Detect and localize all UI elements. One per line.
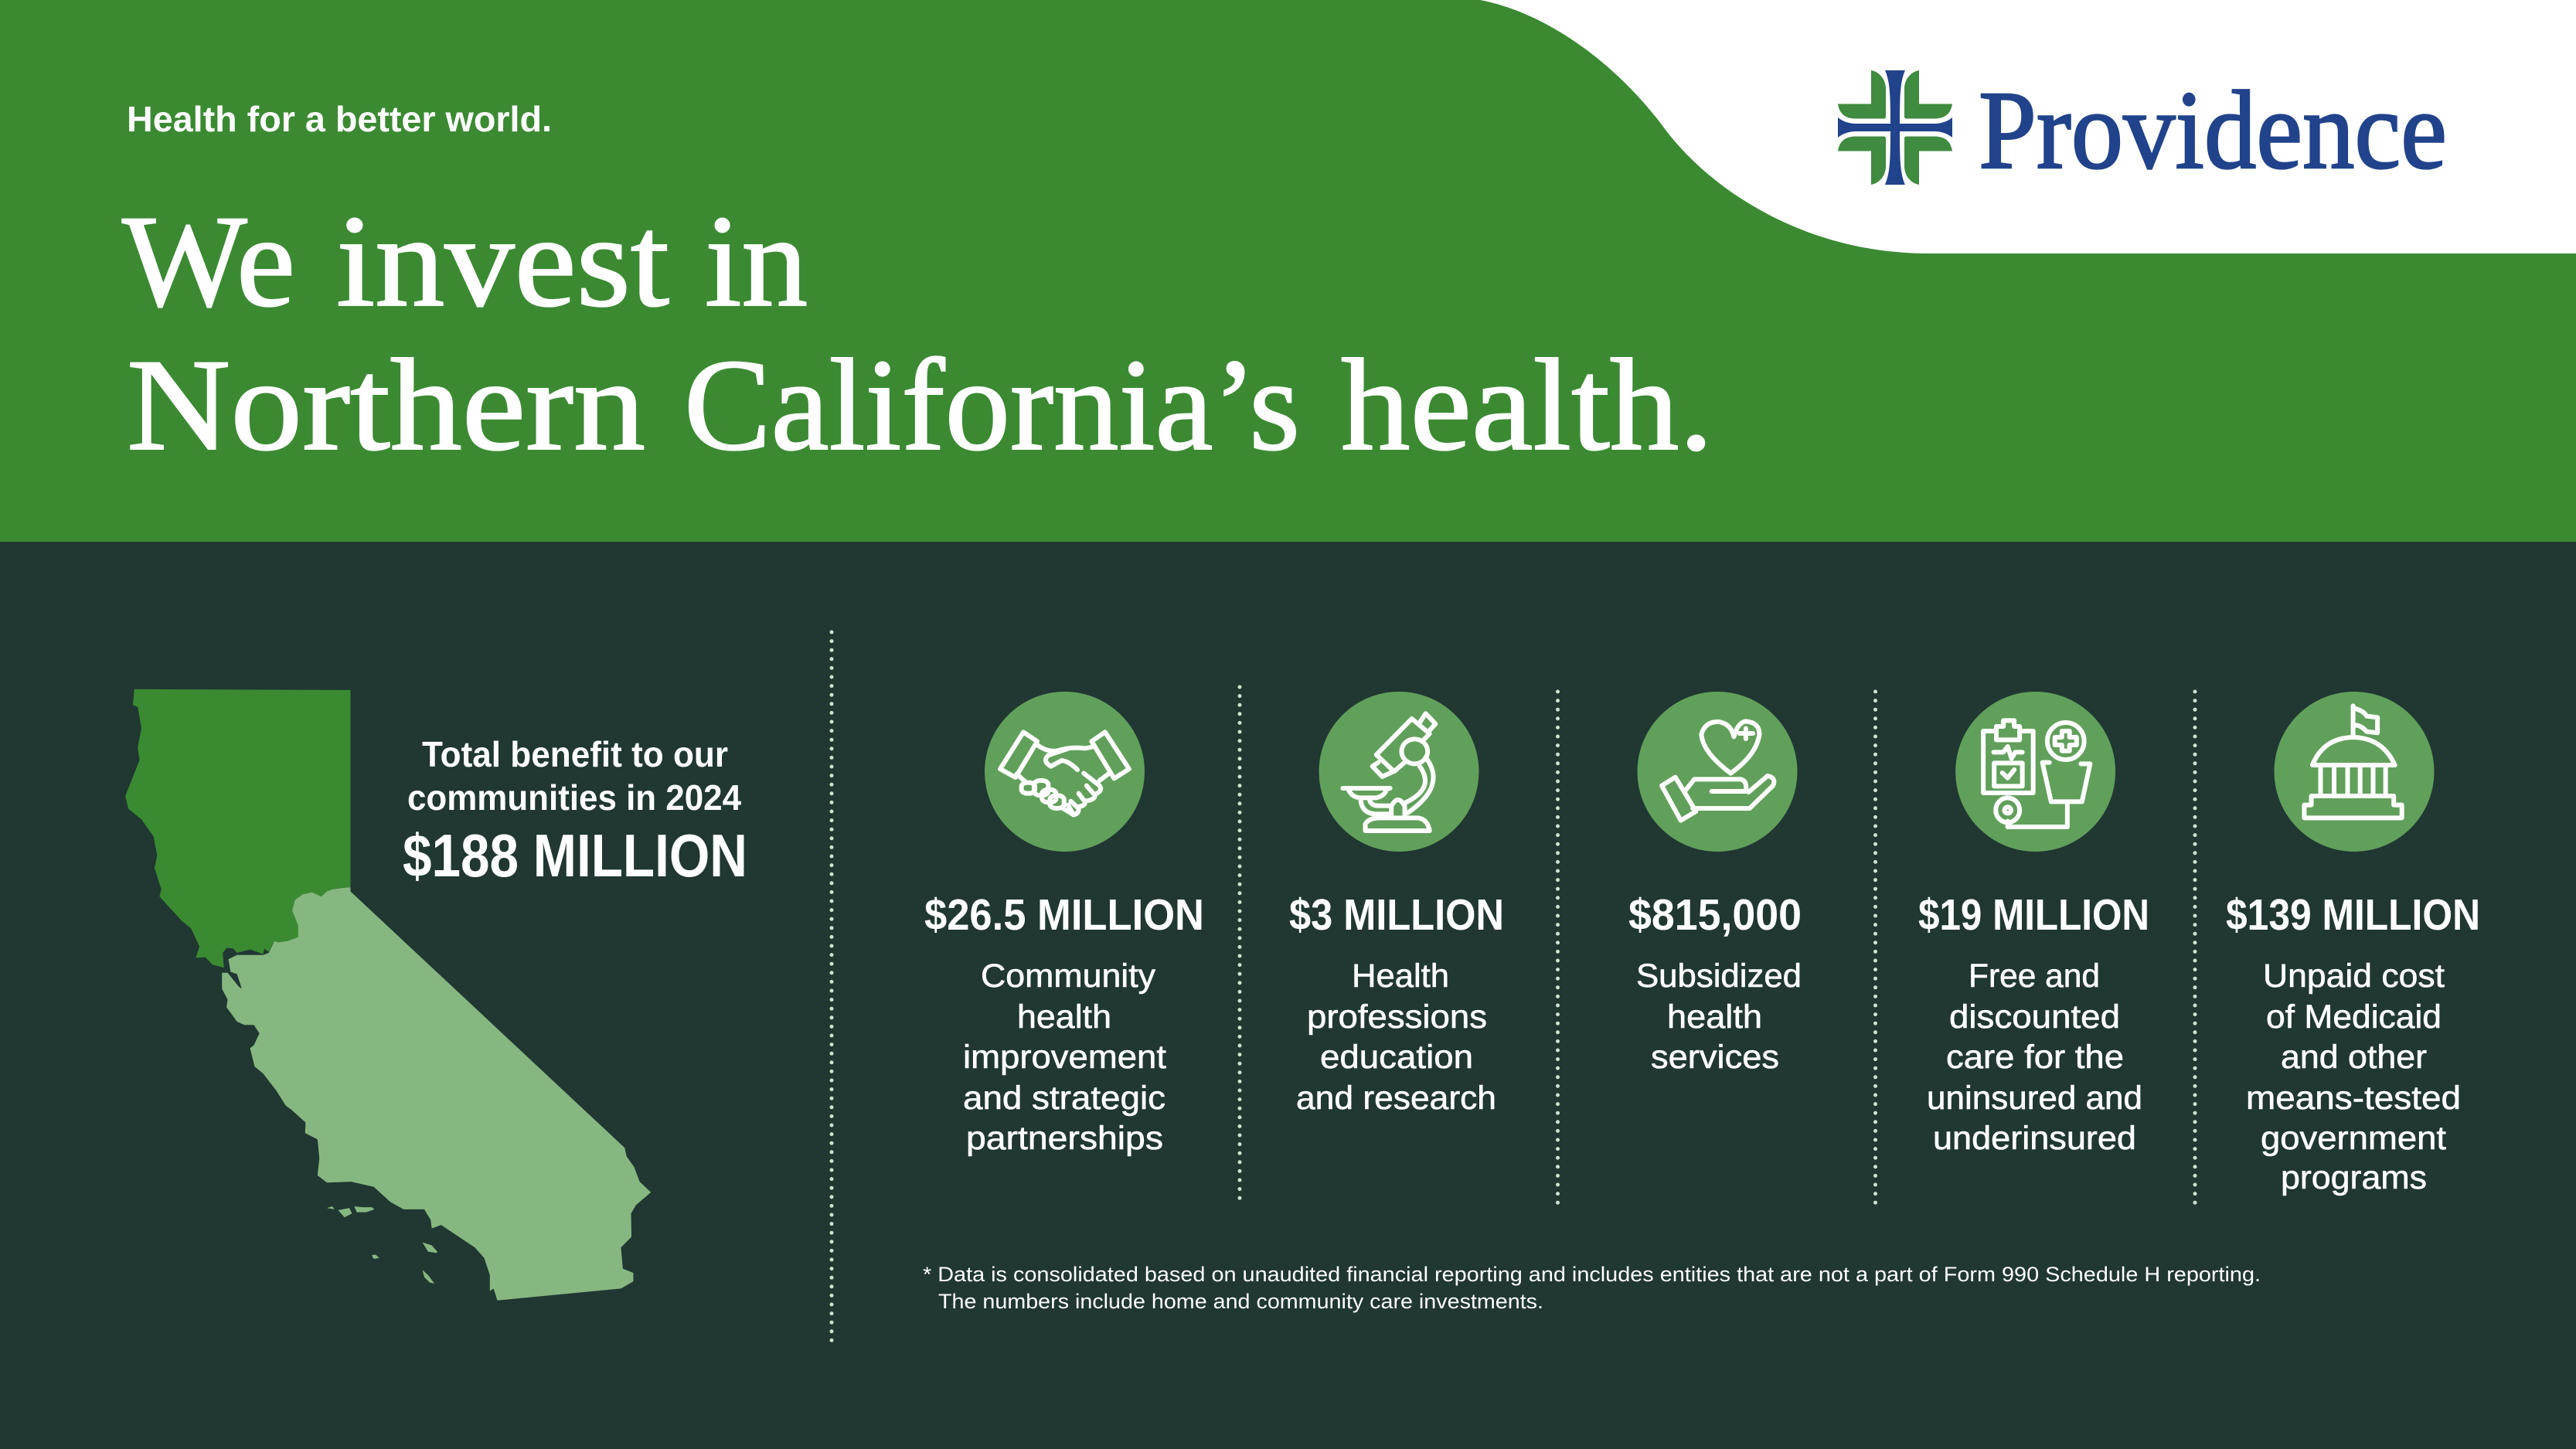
column: community health	[924, 692, 1204, 1157]
description: Free and	[1969, 957, 2100, 995]
description: Subsidized	[1636, 957, 1802, 995]
map region: Southern and Central California	[222, 887, 651, 1301]
footnote: * Data is consolidated based on unaudited financial reporting and includes entities that are not a part of Form 990 Schedule H reporting.	[923, 1263, 2261, 1286]
description: partnerships	[966, 1120, 1163, 1157]
title: invest	[336, 189, 669, 334]
description	[1296, 957, 1496, 1117]
description	[1636, 957, 1802, 1076]
description: improvement	[963, 1039, 1166, 1076]
map region: Northern California	[125, 689, 350, 968]
column: unpaid Medicaid cost	[2226, 692, 2480, 1196]
column: free and discounted care	[1918, 692, 2149, 1157]
icon: government building	[2274, 692, 2435, 852]
title: Northern	[127, 332, 645, 478]
description: discounted	[1949, 998, 2120, 1036]
footnote: The numbers include home and community care investments.	[938, 1290, 1543, 1313]
icon: hand holding heart	[1637, 692, 1798, 852]
description: means-tested	[2246, 1080, 2461, 1117]
title: in	[705, 189, 808, 334]
map: California	[125, 689, 651, 1301]
dotted column dividers	[1240, 687, 2195, 1205]
description: care for the	[1946, 1039, 2124, 1076]
title	[122, 189, 1713, 478]
description: Unpaid cost	[2263, 957, 2445, 995]
amount: $26.5 MILLION	[924, 890, 1204, 940]
description	[2246, 957, 2461, 1196]
description: government	[2261, 1120, 2446, 1157]
icon: handshake	[985, 692, 1145, 852]
title: We	[122, 189, 295, 334]
total benefit callout: communities in 2024	[407, 777, 741, 818]
panel: header band	[0, 0, 2576, 542]
footnote	[923, 1263, 2261, 1313]
logo: Providence	[1838, 69, 2447, 192]
column: subsidized services	[1628, 692, 1802, 1076]
panel: body background	[0, 542, 2576, 1449]
description: services	[1651, 1039, 1779, 1076]
icon: clipboard and stethoscope	[1955, 692, 2115, 852]
amount: $19 MILLION	[1918, 890, 2149, 940]
description: Health	[1352, 957, 1449, 995]
icon: Providence cross	[1838, 70, 1952, 185]
description: and strategic	[963, 1080, 1165, 1117]
amount: $139 MILLION	[2226, 890, 2480, 940]
description: uninsured and	[1927, 1080, 2142, 1117]
title: California’s	[684, 332, 1300, 478]
total benefit callout	[403, 734, 747, 889]
amount: $815,000	[1628, 890, 1802, 940]
description: health	[1017, 998, 1111, 1036]
description: of Medicaid	[2266, 998, 2442, 1036]
title: health.	[1341, 332, 1713, 478]
description: and other	[2281, 1039, 2427, 1076]
wordmark: Providence	[1979, 69, 2447, 192]
description	[1927, 957, 2142, 1157]
description: Community	[981, 957, 1156, 995]
dotted main divider	[830, 632, 833, 1345]
amount: $3 MILLION	[1289, 890, 1504, 940]
description	[963, 957, 1166, 1157]
description: health	[1667, 998, 1762, 1036]
tagline: Health for a better world.	[127, 99, 552, 139]
description: education	[1320, 1039, 1473, 1076]
column: health professions	[1289, 692, 1504, 1117]
total benefit callout: Total benefit to our	[422, 734, 728, 774]
icon: microscope	[1319, 692, 1479, 852]
description: programs	[2281, 1159, 2427, 1196]
description: and research	[1296, 1080, 1496, 1117]
total benefit callout: $188 MILLION	[403, 821, 747, 889]
description: underinsured	[1933, 1120, 2136, 1157]
description: professions	[1307, 998, 1487, 1036]
white logo area with curved edge	[1480, 0, 2576, 253]
